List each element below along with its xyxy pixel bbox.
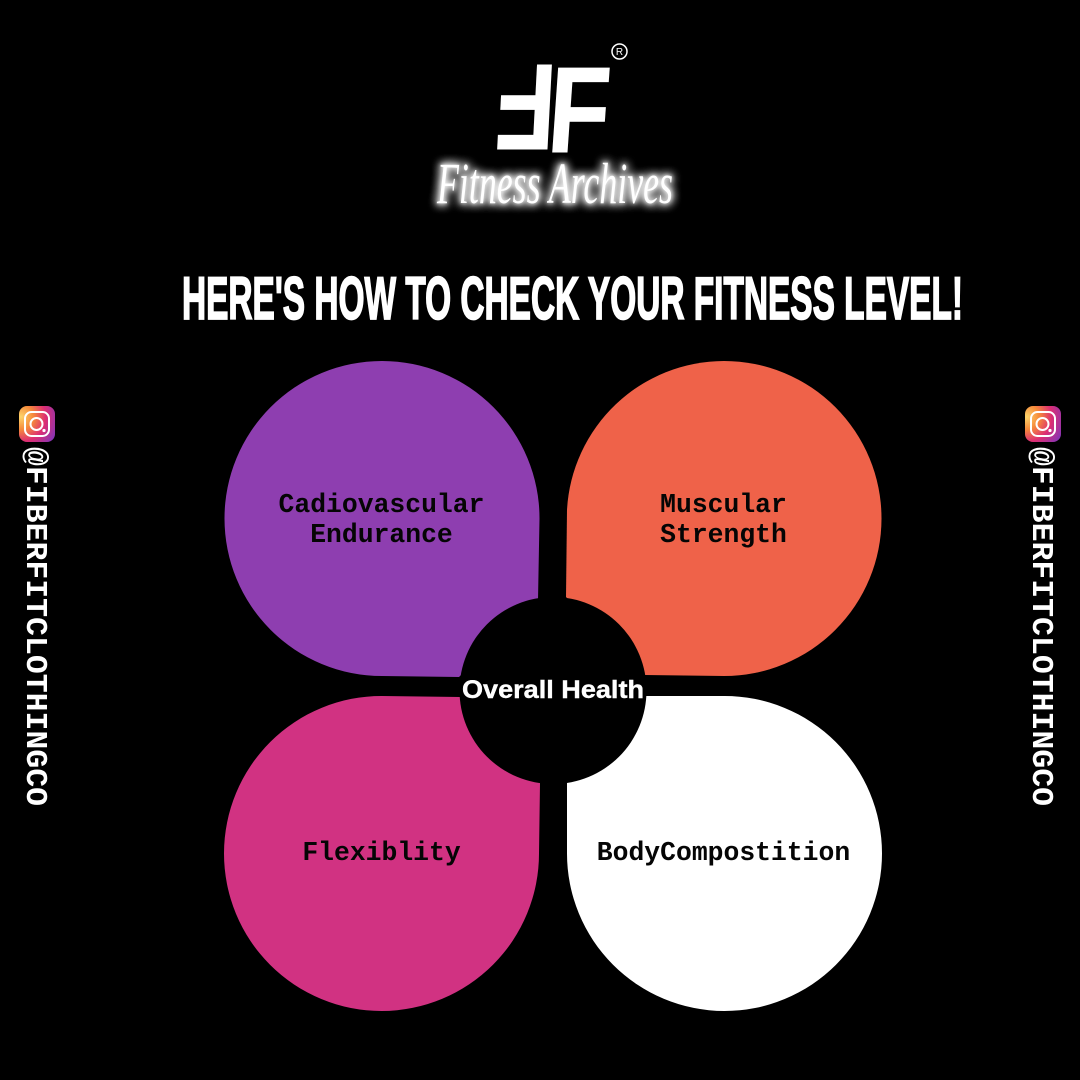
panel: Cardiovascular Endurance: Endurance [310, 520, 453, 550]
logo mark: double F: F [544, 42, 615, 178]
logo mark: double F: F [493, 39, 559, 174]
right social handle [1023, 406, 1061, 806]
logo mark: double F [493, 39, 615, 178]
center circle: Overall Health [460, 597, 646, 784]
panel: Flexibility: Flexiblity [302, 838, 461, 868]
left social handle [17, 406, 55, 806]
panel: Flexibility [224, 696, 540, 1011]
registered mark [612, 44, 627, 59]
panel: Muscular Strength [566, 361, 882, 676]
panel: Cardiovascular Endurance: Cadiovascular [279, 490, 484, 520]
registered mark: R [616, 47, 623, 58]
logo wordmark: Fitness Archives [436, 151, 673, 216]
logo: Fitness Archives [436, 39, 673, 216]
panel: Muscular Strength: Muscular [660, 490, 787, 520]
handle text right: @FIBERFITCLOTHINGCO [1023, 447, 1057, 806]
panel: Body Composition [567, 696, 882, 1011]
panel: Body Composition: BodyCompostition [597, 838, 850, 868]
handle text left: @FIBERFITCLOTHINGCO [17, 447, 51, 806]
icon: instagram right [1025, 406, 1061, 442]
icon: instagram left [19, 406, 55, 442]
panel: Muscular Strength: Strength [660, 520, 787, 550]
center circle: Overall Health: Overall Health [462, 676, 644, 704]
panel: Cardiovascular Endurance [225, 361, 540, 677]
